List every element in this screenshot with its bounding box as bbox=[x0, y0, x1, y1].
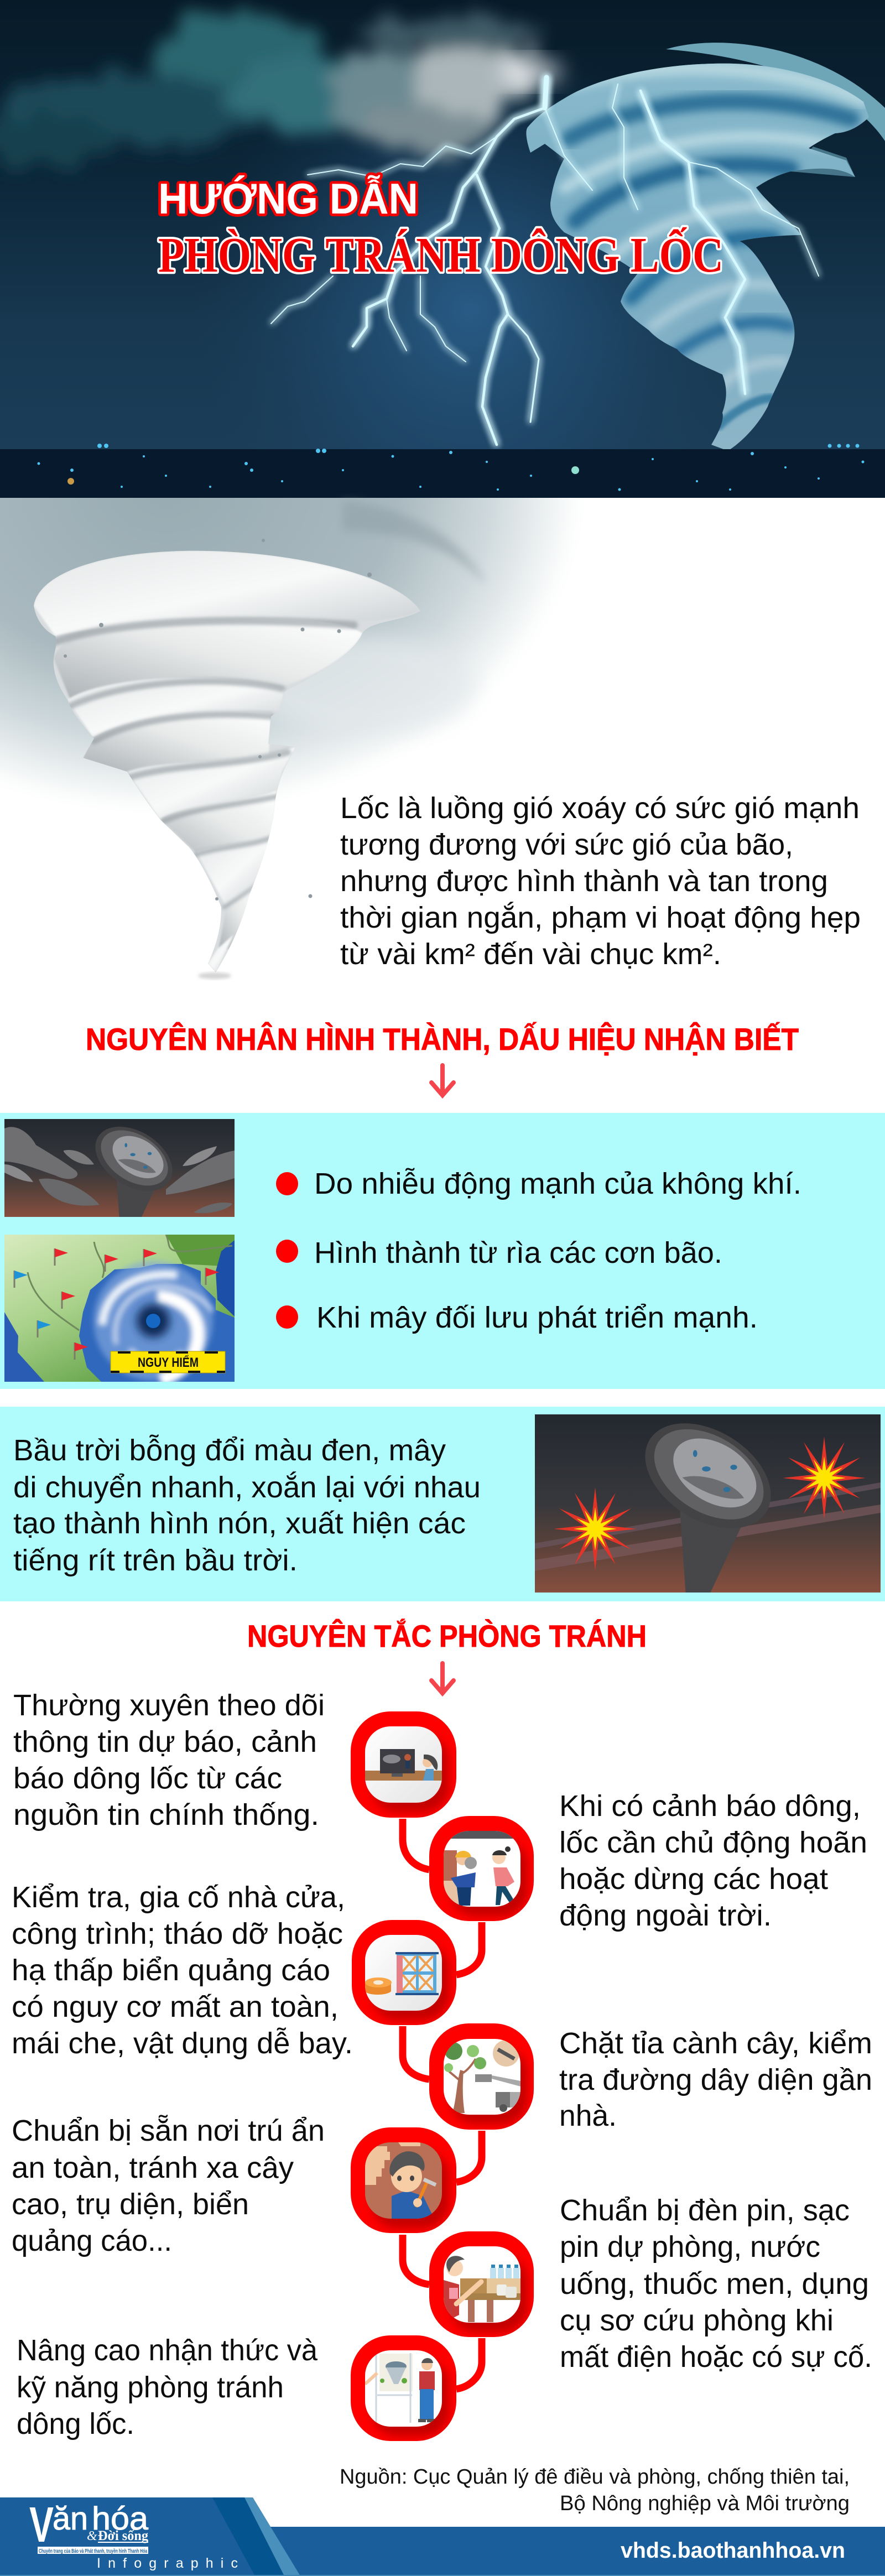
logo: Văn hóa & Đời sống: Chuyên trang của Báo và Phát thanh, truyền hình Thanh Hóa bbox=[39, 2548, 147, 2554]
intro paragraph: tương đương với sức gió của bão, bbox=[340, 829, 793, 861]
step 7 bbox=[17, 2334, 456, 2441]
step 3 text bbox=[12, 1881, 353, 2060]
step 3 bbox=[12, 1881, 456, 2060]
intro paragraph bbox=[340, 792, 861, 971]
step 3 icon: taped window and tape roll bbox=[352, 1920, 456, 2025]
logo: Văn hóa & Đời sống: hóa bbox=[92, 2501, 149, 2537]
step 2 text: động ngoài trời. bbox=[559, 1900, 772, 1932]
step 5 text: an toàn, tránh xa cây bbox=[12, 2152, 294, 2184]
bullet list of causes: Hình thành từ rìa các cơn bão. bbox=[314, 1237, 722, 1269]
step 3 text: hạ thấp biển quảng cáo bbox=[12, 1954, 330, 1987]
step 5 icon: man with hammer in shelter bbox=[351, 2127, 456, 2233]
tornado bbox=[526, 43, 885, 449]
logo: Văn hóa & Đời sống: & bbox=[87, 2529, 97, 2543]
step 2 icon: worker warning a woman bbox=[429, 1816, 534, 1921]
step 2 text bbox=[559, 1790, 867, 1932]
heading: causes and signs: NGUYÊN NHÂN HÌNH THÀNH, DẤU HIỆU NHẬN BIẾT bbox=[86, 1022, 799, 1057]
logo: Văn hóa & Đời sống: Đời sống bbox=[98, 2528, 148, 2543]
logo: Văn hóa & Đời sống: Infographic bbox=[97, 2556, 238, 2571]
step 2 text: hoặc dừng các hoạt bbox=[559, 1863, 828, 1896]
heading: prevention principles: NGUYÊN TẮC PHÒNG TRÁNH bbox=[247, 1619, 647, 1653]
bullet list of causes bbox=[276, 1168, 801, 1334]
header hero illustration bbox=[0, 0, 885, 498]
step 3 text: công trình; tháo dỡ hoặc bbox=[12, 1918, 343, 1950]
city lights horizon bbox=[0, 444, 885, 498]
arrow down 1 bbox=[431, 1065, 454, 1095]
step 3 text: mái che, vật dụng dễ bay. bbox=[12, 2027, 353, 2060]
storm clouds bbox=[0, 11, 561, 168]
step 7 text: kỹ năng phòng tránh bbox=[17, 2371, 284, 2404]
warning sign bbox=[111, 1351, 225, 1373]
logo: Văn hóa & Đời sống bbox=[29, 2497, 238, 2571]
step 4 text bbox=[559, 2027, 872, 2132]
step 4 text: tra đường dây diện gần bbox=[559, 2064, 872, 2096]
step 6 icon: woman preparing supplies bbox=[429, 2231, 534, 2337]
step 5 text: quảng cáo... bbox=[12, 2225, 172, 2257]
main title bbox=[158, 174, 723, 283]
step 5 bbox=[12, 2115, 456, 2257]
gray fog background bbox=[0, 498, 608, 830]
step 7 text: Nâng cao nhận thức và bbox=[17, 2334, 317, 2367]
step 1 bbox=[13, 1689, 456, 1831]
step 6 text: uống, thuốc men, dụng bbox=[560, 2268, 869, 2301]
step 7 text bbox=[17, 2334, 317, 2440]
step 5 text: Chuẩn bị sẵn nơi trú ẩn bbox=[12, 2115, 325, 2147]
step 4 text: nhà. bbox=[559, 2100, 617, 2132]
step 2 text: Khi có cảnh báo dông, bbox=[559, 1790, 861, 1823]
step 3 text: có nguy cơ mất an toàn, bbox=[12, 1991, 339, 2023]
step 2 text: lốc cần chủ động hoãn bbox=[559, 1826, 867, 1859]
step 1 text: Thường xuyên theo dõi bbox=[13, 1689, 325, 1722]
signs paragraph: di chuyển nhanh, xoắn lại với nhau bbox=[13, 1471, 481, 1504]
step 7 icon: man presenting tornado poster bbox=[351, 2335, 456, 2441]
step 1 text: nguồn tin chính thống. bbox=[13, 1799, 319, 1831]
step 5 text bbox=[12, 2115, 325, 2257]
step 1 text bbox=[13, 1689, 325, 1831]
signs paragraph: Bầu trời bỗng đổi màu đen, mây bbox=[13, 1434, 446, 1467]
intro paragraph: nhưng được hình thành và tan trong bbox=[340, 865, 828, 898]
image: tornado with explosions bbox=[535, 1402, 881, 1594]
signs paragraph: tạo thành hình nón, xuất hiện các bbox=[13, 1507, 466, 1540]
step 2 bbox=[429, 1790, 867, 1932]
intro paragraph: thời gian ngắn, phạm vi hoạt động hẹp bbox=[340, 902, 861, 934]
step 4 icon: tree trimming with crane truck bbox=[429, 2023, 534, 2130]
image: storm scene bbox=[4, 1119, 235, 1217]
bullet list of causes: Do nhiễu động mạnh của không khí. bbox=[314, 1168, 801, 1200]
bullet list of causes: Khi mây đối lưu phát triển mạnh. bbox=[316, 1302, 758, 1334]
step 6 bbox=[429, 2194, 872, 2374]
image: weather map with hurricane bbox=[4, 1235, 235, 1382]
step 1 text: báo dông lốc từ các bbox=[13, 1762, 282, 1795]
source credit: Nguồn: Cục Quản lý đê điều và phòng, chống thiên tai, bbox=[340, 2465, 850, 2489]
intro section with white tornado bbox=[0, 498, 861, 979]
source credit: Bộ Nông nghiệp và Môi trường bbox=[560, 2492, 850, 2515]
step 6 text: Chuẩn bị đèn pin, sạc bbox=[560, 2194, 850, 2227]
arrow down 2 bbox=[431, 1663, 454, 1693]
step 3 text: Kiểm tra, gia cố nhà cửa, bbox=[12, 1881, 345, 1914]
footer band bbox=[0, 2497, 885, 2576]
logo: Văn hóa & Đời sống: V bbox=[29, 2497, 54, 2553]
intro paragraph: Lốc là luồng gió xoáy có sức gió mạnh bbox=[340, 792, 860, 825]
step 6 text: cụ sơ cứu phòng khi bbox=[560, 2304, 834, 2337]
panel: causes bbox=[0, 1113, 885, 1389]
white tornado illustration bbox=[22, 501, 487, 979]
source credit bbox=[340, 2465, 850, 2515]
step 4 text: Chặt tỉa cành cây, kiểm bbox=[559, 2027, 872, 2060]
step 6 text bbox=[560, 2194, 872, 2374]
logo: Văn hóa & Đời sống: ăn bbox=[53, 2501, 88, 2537]
signs paragraph: tiếng rít trên bầu trời. bbox=[13, 1544, 298, 1577]
main title: HƯỚNG DẪN bbox=[158, 174, 418, 223]
intro paragraph: từ vài km² đến vài chục km². bbox=[340, 938, 721, 971]
step 1 text: thông tin dự báo, cảnh bbox=[13, 1726, 317, 1758]
warning sign: NGUY HIỂM bbox=[138, 1355, 199, 1370]
step 6 text: mất điện hoặc có sự cố. bbox=[560, 2341, 872, 2374]
website address: vhds.baothanhhoa.vn bbox=[621, 2538, 845, 2563]
step 7 text: dông lốc. bbox=[17, 2408, 134, 2440]
lightning bolts bbox=[271, 77, 819, 445]
signs paragraph bbox=[13, 1434, 481, 1577]
step 6 text: pin dự phòng, nước bbox=[560, 2231, 820, 2263]
step 5 text: cao, trụ diện, biển bbox=[12, 2188, 249, 2221]
main title: PHÒNG TRÁNH DÔNG LỐC bbox=[158, 226, 723, 283]
flow connectors bbox=[403, 1819, 482, 2389]
step 4 bbox=[429, 2023, 872, 2132]
step 1 icon: watching forecast on TV bbox=[351, 1711, 456, 1818]
panel: warning signs bbox=[0, 1402, 885, 1601]
